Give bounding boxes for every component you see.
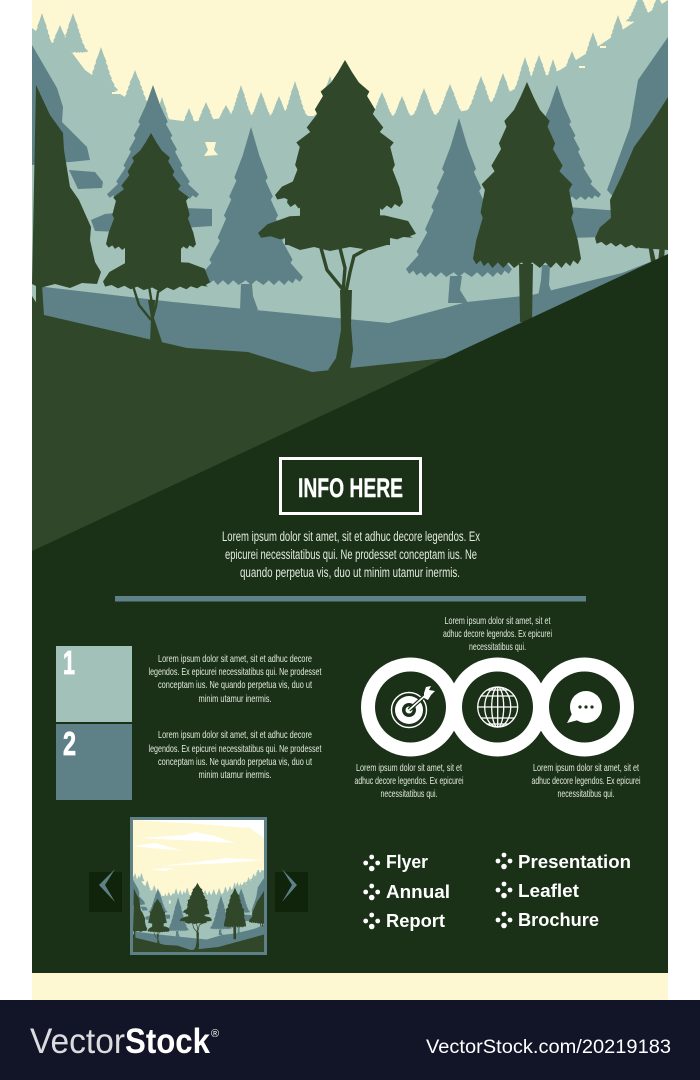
icon: globe — [478, 687, 518, 727]
tree: far right — [595, 97, 675, 262]
teal ground — [36, 255, 668, 380]
bullet list: left column: Report — [386, 911, 445, 931]
left circle caption — [354, 762, 464, 800]
icon: speech bubble — [567, 691, 602, 723]
left circle caption: Lorem ipsum dolor sit amet, sit et — [356, 762, 462, 774]
bullet list: right column: Brochure — [518, 910, 599, 930]
text block 1: conceptam ius. Ne quando perpetua vis, duo ut — [158, 679, 312, 691]
top circle caption: Lorem ipsum dolor sit amet, sit et — [444, 615, 551, 627]
cream specks among trees — [112, 46, 606, 156]
tree: right — [473, 82, 581, 322]
left circle caption: adhuc decore legendos. Ex epicurei — [354, 775, 464, 787]
numbered block 1 — [56, 644, 132, 722]
top circle caption: adhuc decore legendos. Ex epicurei — [443, 628, 552, 640]
top circle caption — [443, 615, 552, 653]
footer logo: Vector — [30, 1022, 125, 1061]
text block 2: legendos. Ex epicurei necessitatibus qui. Ne prodesset — [148, 743, 322, 755]
right navigation arrow — [275, 869, 308, 912]
bullet list: right column — [496, 852, 631, 930]
footer url: VectorStock.com/20219183 — [426, 1037, 671, 1058]
teal mid-distance trees — [32, 37, 668, 310]
forest illustration — [27, 0, 675, 560]
text block 1: legendos. Ex epicurei necessitatibus qui. Ne prodesset — [148, 666, 322, 678]
intro text: quando perpetua vis, duo ut minim utamur inermis. — [240, 565, 460, 580]
footer logo: Stock — [125, 1022, 210, 1061]
text block 2 — [148, 729, 322, 781]
right circle caption — [532, 762, 640, 800]
numbered block 2: 2 — [63, 725, 76, 762]
dark green lower panel — [32, 254, 668, 973]
text block 1 — [148, 653, 322, 705]
numbered block 1: 1 — [63, 644, 75, 681]
tree: left centre — [103, 133, 210, 342]
three linked rings — [361, 658, 634, 756]
footer logo: ® — [211, 1028, 219, 1040]
tree: centre — [258, 60, 416, 370]
right circle caption: necessitatibus qui. — [558, 788, 614, 800]
tree: far left — [32, 85, 101, 288]
footer logo — [30, 1022, 219, 1061]
hillside ground — [32, 296, 668, 560]
icon: target with arrow — [392, 686, 435, 728]
left circle caption: necessitatibus qui. — [380, 788, 438, 800]
left navigation arrow — [89, 869, 122, 912]
heading box: INFO HERE — [280, 458, 420, 514]
text block 2: minim utamur inermis. — [198, 769, 272, 781]
footer bar — [0, 1000, 700, 1080]
text block 1: Lorem ipsum dolor sit amet, sit et adhuc decore — [158, 653, 312, 665]
bullet list: left column: Flyer — [386, 852, 428, 872]
right circle caption: adhuc decore legendos. Ex epicurei — [532, 775, 640, 787]
heading box: INFO HERE: INFO HERE — [298, 473, 403, 503]
divider bar — [115, 596, 586, 602]
intro text: Lorem ipsum dolor sit amet, sit et adhuc decore legendos. Ex — [222, 529, 480, 544]
right circle caption: Lorem ipsum dolor sit amet, sit et — [533, 762, 639, 774]
distant light tree line — [27, 0, 672, 345]
text block 2: Lorem ipsum dolor sit amet, sit et adhuc decore — [158, 729, 312, 741]
intro text — [222, 529, 480, 580]
text block 1: minim utamur inermis. — [198, 693, 272, 705]
bullet list: right column: Leaflet — [518, 881, 579, 901]
bullet list: left column — [363, 852, 450, 931]
dark foreground trees — [32, 60, 675, 370]
bullet list: right column: Presentation — [518, 852, 631, 872]
thumbnail picture — [130, 817, 267, 955]
bullet list: left column: Annual — [386, 882, 450, 902]
top circle caption: necessitatibus qui. — [469, 641, 526, 653]
numbered block 2 — [56, 724, 132, 800]
text block 2: conceptam ius. Ne quando perpetua vis, duo ut — [158, 756, 312, 768]
intro text: epicurei necessitatibus qui. Ne prodesset conceptam ius. Ne — [225, 547, 477, 562]
